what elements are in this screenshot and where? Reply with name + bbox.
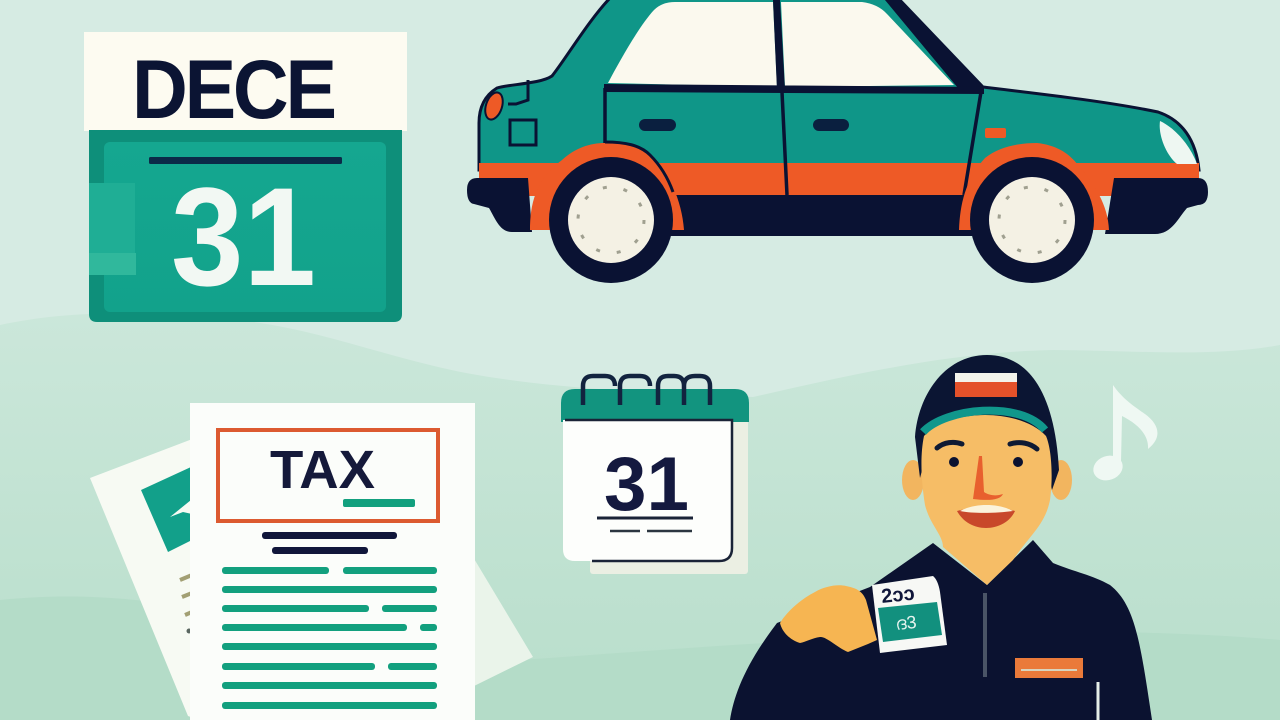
- ears: [902, 460, 1072, 500]
- calendar header: [84, 32, 407, 137]
- back left page: [90, 438, 199, 720]
- front wheel: [970, 157, 1094, 283]
- window sill and pillars: [604, 0, 984, 94]
- small desk calendar: [561, 376, 749, 574]
- main tax page: [190, 403, 475, 720]
- tax heading box: [218, 430, 438, 521]
- nose: [973, 456, 1003, 500]
- fuel cap marks: [508, 80, 536, 145]
- calendar header: DECE: [132, 43, 334, 137]
- date number: 31: [604, 442, 689, 527]
- delivery man character: [730, 355, 1152, 720]
- front wheel arch: [959, 143, 1109, 230]
- front bumper: [1105, 178, 1208, 234]
- calendar body: 31: [171, 158, 316, 315]
- eyebrows: [937, 442, 1037, 449]
- rear window: [608, 2, 777, 87]
- cap badge: [955, 373, 1017, 397]
- underlines: [597, 516, 693, 520]
- door handles: [639, 119, 849, 131]
- front window: [781, 2, 954, 87]
- tax heading box: TAX: [270, 440, 375, 500]
- tax documents: [90, 403, 533, 720]
- musical note: [1090, 385, 1157, 484]
- face and neck: [921, 415, 1052, 585]
- name badge: [1015, 658, 1083, 678]
- door lines: [605, 88, 981, 195]
- rear wheel arch: [530, 143, 684, 230]
- mouth: [957, 505, 1015, 528]
- calendar body: [89, 130, 402, 322]
- binding rings: [583, 376, 710, 405]
- car body: [479, 0, 1199, 170]
- sleeve highlight: [1096, 682, 1100, 720]
- calendar header: [561, 389, 749, 422]
- held card: 2ɔɔ: [880, 583, 916, 608]
- hand: [780, 585, 877, 652]
- rear bumper: [467, 178, 532, 232]
- red stripe: [479, 163, 1199, 196]
- page: [563, 420, 732, 561]
- back right page: [470, 552, 533, 688]
- large calendar: December 31: [84, 32, 407, 322]
- jacket: [730, 540, 1152, 720]
- tail light: [482, 90, 506, 122]
- subtitle lines: [262, 532, 397, 554]
- held card: ദ3: [894, 612, 917, 634]
- headlight: [1160, 121, 1197, 164]
- cap brim: [923, 411, 1045, 432]
- zipper: [983, 593, 987, 677]
- car illustration: [467, 0, 1208, 283]
- cap: [915, 355, 1059, 490]
- roof and windscreen pillar: [640, 0, 984, 88]
- eyes: [949, 457, 1023, 467]
- under body: [660, 195, 990, 236]
- rear wheel: [549, 157, 673, 283]
- held card: [872, 576, 947, 653]
- side marker: [985, 128, 1006, 138]
- body text lines: [222, 567, 437, 709]
- back sheet: [590, 420, 748, 574]
